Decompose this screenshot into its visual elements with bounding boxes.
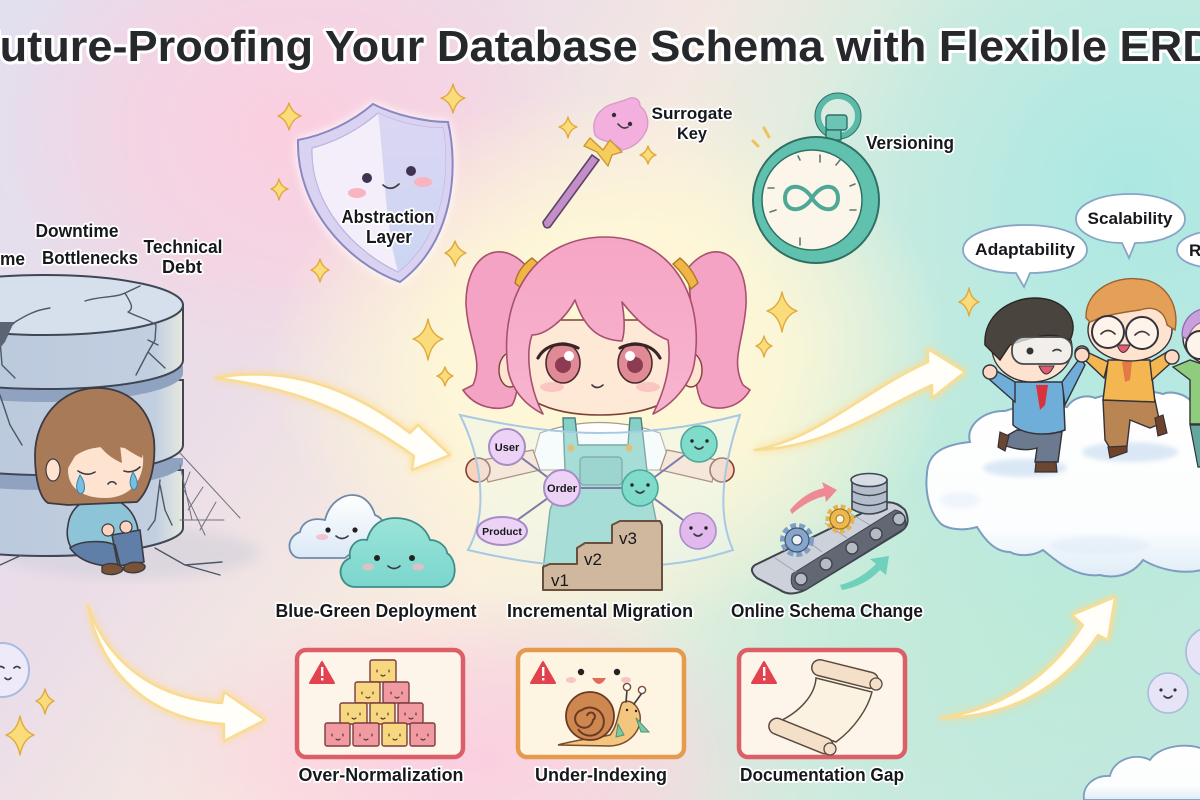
icon: migration stairs v1 v2 v3: v1 — [551, 571, 569, 590]
node: product: Product — [482, 526, 522, 538]
arrow: problems to solutions — [215, 374, 450, 470]
label: documentation gap: Documentation Gap — [740, 765, 904, 785]
panel: online schema change — [731, 474, 923, 621]
icon: gears — [783, 507, 852, 554]
icons: sparkles around girl — [413, 292, 797, 386]
icon: migration stairs v1 v2 v3: v3 — [619, 529, 637, 548]
label: downtime bottlenecks technical debt: Bottlenecks — [42, 248, 138, 268]
panel: shield abstraction layer — [271, 84, 466, 282]
icon: shield — [298, 104, 453, 282]
panel: over-normalization warning — [297, 650, 464, 785]
icon: bubble face — [0, 643, 29, 697]
label: under-indexing: Under-Indexing — [535, 765, 667, 785]
icon: warning triangle — [752, 662, 776, 683]
block faces — [332, 670, 428, 740]
label: abstraction layer: Layer — [366, 227, 412, 247]
legs — [70, 530, 144, 566]
icon: cracked database cylinder — [0, 275, 183, 556]
ground shadow — [0, 527, 260, 579]
label: incremental migration: Incremental Migration — [507, 601, 693, 621]
icon: bubble large — [1186, 627, 1200, 677]
icon: big cloud — [926, 391, 1200, 576]
label: downtime bottlenecks technical debt — [0, 221, 222, 277]
hands — [102, 521, 132, 536]
label: abstraction layer — [342, 207, 434, 247]
panel: blue-green deployment — [276, 495, 476, 621]
label: downtime bottlenecks technical debt: Debt — [162, 257, 202, 277]
label: surrogate key: Key — [677, 124, 708, 143]
icon: sparkle large — [6, 716, 34, 755]
icon: database on conveyor — [851, 474, 887, 514]
chart: flexible ERD sheet — [460, 415, 740, 590]
face — [499, 320, 702, 415]
icon: magic wand — [543, 98, 648, 228]
panel: versioning stopwatch — [753, 93, 954, 263]
bangs — [65, 408, 143, 472]
node: happy teal middle — [622, 470, 658, 506]
icon: blank scroll — [766, 658, 882, 756]
icon: red up arrow — [790, 482, 837, 514]
panel: legacy database problems — [0, 221, 260, 579]
icon: migration stairs v1 v2 v3 — [543, 521, 662, 590]
face — [68, 447, 143, 498]
icon: stacked blocks — [325, 660, 435, 746]
hair back — [35, 388, 154, 505]
panel: under-indexing warning — [518, 650, 684, 785]
callout: reliability — [1177, 230, 1200, 268]
node: user — [489, 429, 525, 465]
hair fringe — [507, 237, 696, 414]
node: happy teal top — [681, 426, 717, 462]
node: order: Order — [547, 483, 578, 495]
label: abstraction layer: Abstraction — [342, 207, 434, 227]
callout: adaptability — [963, 225, 1087, 287]
character: partial third boy — [1173, 308, 1200, 467]
icons: decorative bubbles right — [1148, 627, 1200, 713]
callout: adaptability: Adaptability — [975, 240, 1076, 259]
icon: smiling snail — [558, 683, 649, 746]
icon: cobweb — [180, 453, 240, 535]
node: user: User — [495, 442, 520, 454]
label: downtime bottlenecks technical debt: Technical — [144, 237, 222, 257]
transparent sheet — [460, 415, 740, 568]
label: over-normalization: Over-Normalization — [298, 765, 464, 785]
card — [518, 650, 684, 757]
arrow: pitfalls to outcome — [940, 597, 1115, 718]
card — [739, 650, 905, 757]
character: pink-haired girl holding flexible ERD — [463, 237, 750, 570]
callout: scalability: Scalability — [1088, 209, 1173, 228]
label: downtime bottlenecks technical debt: Downtime — [36, 221, 118, 241]
label: blue-green deployment: Blue-Green Deployment — [276, 601, 476, 621]
node: order — [544, 470, 580, 506]
sweater — [67, 497, 138, 553]
icon: warning triangle — [310, 662, 334, 683]
icons: sparkles — [271, 84, 466, 282]
icon: white cloud — [289, 495, 384, 558]
label: downtime bottlenecks technical debt: me — [0, 249, 25, 269]
character: boy in orange jacket — [1075, 279, 1179, 458]
label: versioning: Versioning — [866, 133, 954, 153]
panel: surrogate key wand — [543, 98, 732, 228]
ERD connectors — [502, 444, 699, 531]
icon: sparkle small — [36, 689, 54, 714]
icons: decorative bubbles left — [0, 643, 54, 755]
character: boy in blue suit — [983, 298, 1089, 472]
icon: conveyor belt — [752, 502, 908, 594]
icon: small cloud bottom right — [1084, 746, 1200, 800]
panel: happy team on cloud — [926, 194, 1200, 576]
label: surrogate key — [652, 104, 732, 143]
label: surrogate key: Surrogate — [652, 104, 732, 123]
node: product — [477, 517, 527, 545]
icon: migration stairs v1 v2 v3: v2 — [584, 550, 602, 569]
hair ponytails — [463, 252, 750, 408]
node: happy lilac — [680, 513, 716, 549]
card — [297, 650, 463, 757]
icon: sparkle near team — [959, 288, 979, 316]
arrow: solutions to outcome — [755, 349, 965, 450]
shoes — [102, 562, 145, 575]
floor cracks — [0, 548, 222, 575]
title: Future-Proofing Your Database Schema with Flexible ERDs — [0, 22, 1200, 71]
panel: documentation gap warning — [739, 650, 905, 785]
cloud shadows — [940, 442, 1178, 554]
icon: warning triangle — [531, 662, 555, 683]
icons: wand sparkles — [559, 117, 656, 164]
icon: bubble small — [1148, 673, 1188, 713]
label: online schema change: Online Schema Change — [731, 601, 923, 621]
arrow: problems to pitfalls — [88, 605, 265, 741]
icon: stopwatch — [753, 93, 879, 263]
icon: teal cloud — [341, 518, 455, 587]
character: crying girl — [35, 388, 154, 575]
icon: teal up arrow — [840, 556, 889, 590]
callout: scalability — [1076, 194, 1185, 258]
icon: card smile — [566, 669, 631, 684]
body and overalls — [466, 418, 734, 570]
